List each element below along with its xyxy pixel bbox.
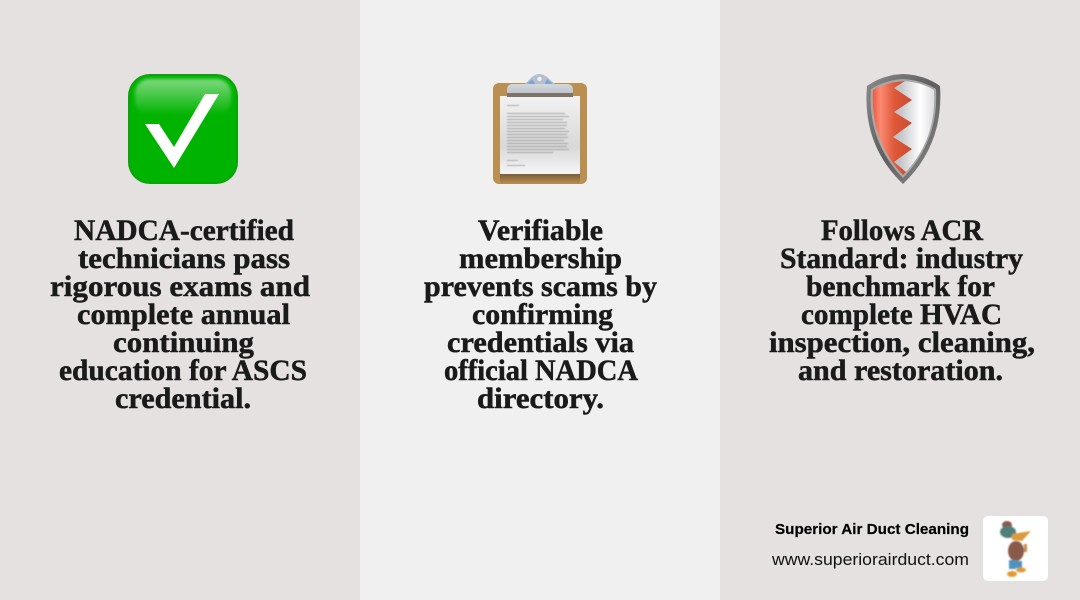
panel: left background <box>0 0 360 600</box>
heading: NADCA-certified technicians: NADCA-certified <box>74 214 294 247</box>
heading: ACR standard: Follows ACR <box>821 214 983 247</box>
text: company name: Superior Air Duct Cleaning <box>775 521 969 538</box>
icon: shield <box>866 74 940 184</box>
heading: ACR standard: and restoration. <box>798 354 1003 387</box>
heading: verifiable membership: membership <box>459 242 622 275</box>
heading: verifiable membership: directory. <box>477 382 604 415</box>
heading: verifiable membership: credentials via <box>447 326 634 359</box>
text: website: www.superiorairduct.com <box>771 551 969 569</box>
heading: NADCA-certified technicians: continuing <box>113 326 254 359</box>
heading: ACR standard: inspection, cleaning, <box>769 326 1035 359</box>
heading: NADCA-certified technicians <box>50 214 310 415</box>
panel: centre background <box>360 0 720 600</box>
heading: ACR standard: complete HVAC <box>801 298 1002 331</box>
heading: NADCA-certified technicians: complete annual <box>77 298 290 331</box>
heading: verifiable membership: official NADCA <box>444 354 638 387</box>
logo: duck mascot <box>983 516 1048 581</box>
heading: NADCA-certified technicians: education for ASCS <box>59 354 307 387</box>
heading: verifiable membership: prevents scams by <box>424 270 657 303</box>
icon: green check mark <box>128 74 238 184</box>
heading: verifiable membership: Verifiable <box>478 214 603 247</box>
heading: ACR standard: benchmark for <box>806 270 995 303</box>
heading: verifiable membership: confirming <box>472 298 613 331</box>
panel: right background <box>720 0 1080 600</box>
icon: clipboard <box>493 74 587 184</box>
heading: ACR standard <box>769 214 1035 387</box>
heading: NADCA-certified technicians: rigorous exams and <box>50 270 310 303</box>
heading: ACR standard: Standard: industry <box>780 242 1023 275</box>
heading: verifiable membership <box>424 214 657 415</box>
heading: NADCA-certified technicians: technicians pass <box>78 242 290 275</box>
heading: NADCA-certified technicians: credential. <box>115 382 251 415</box>
